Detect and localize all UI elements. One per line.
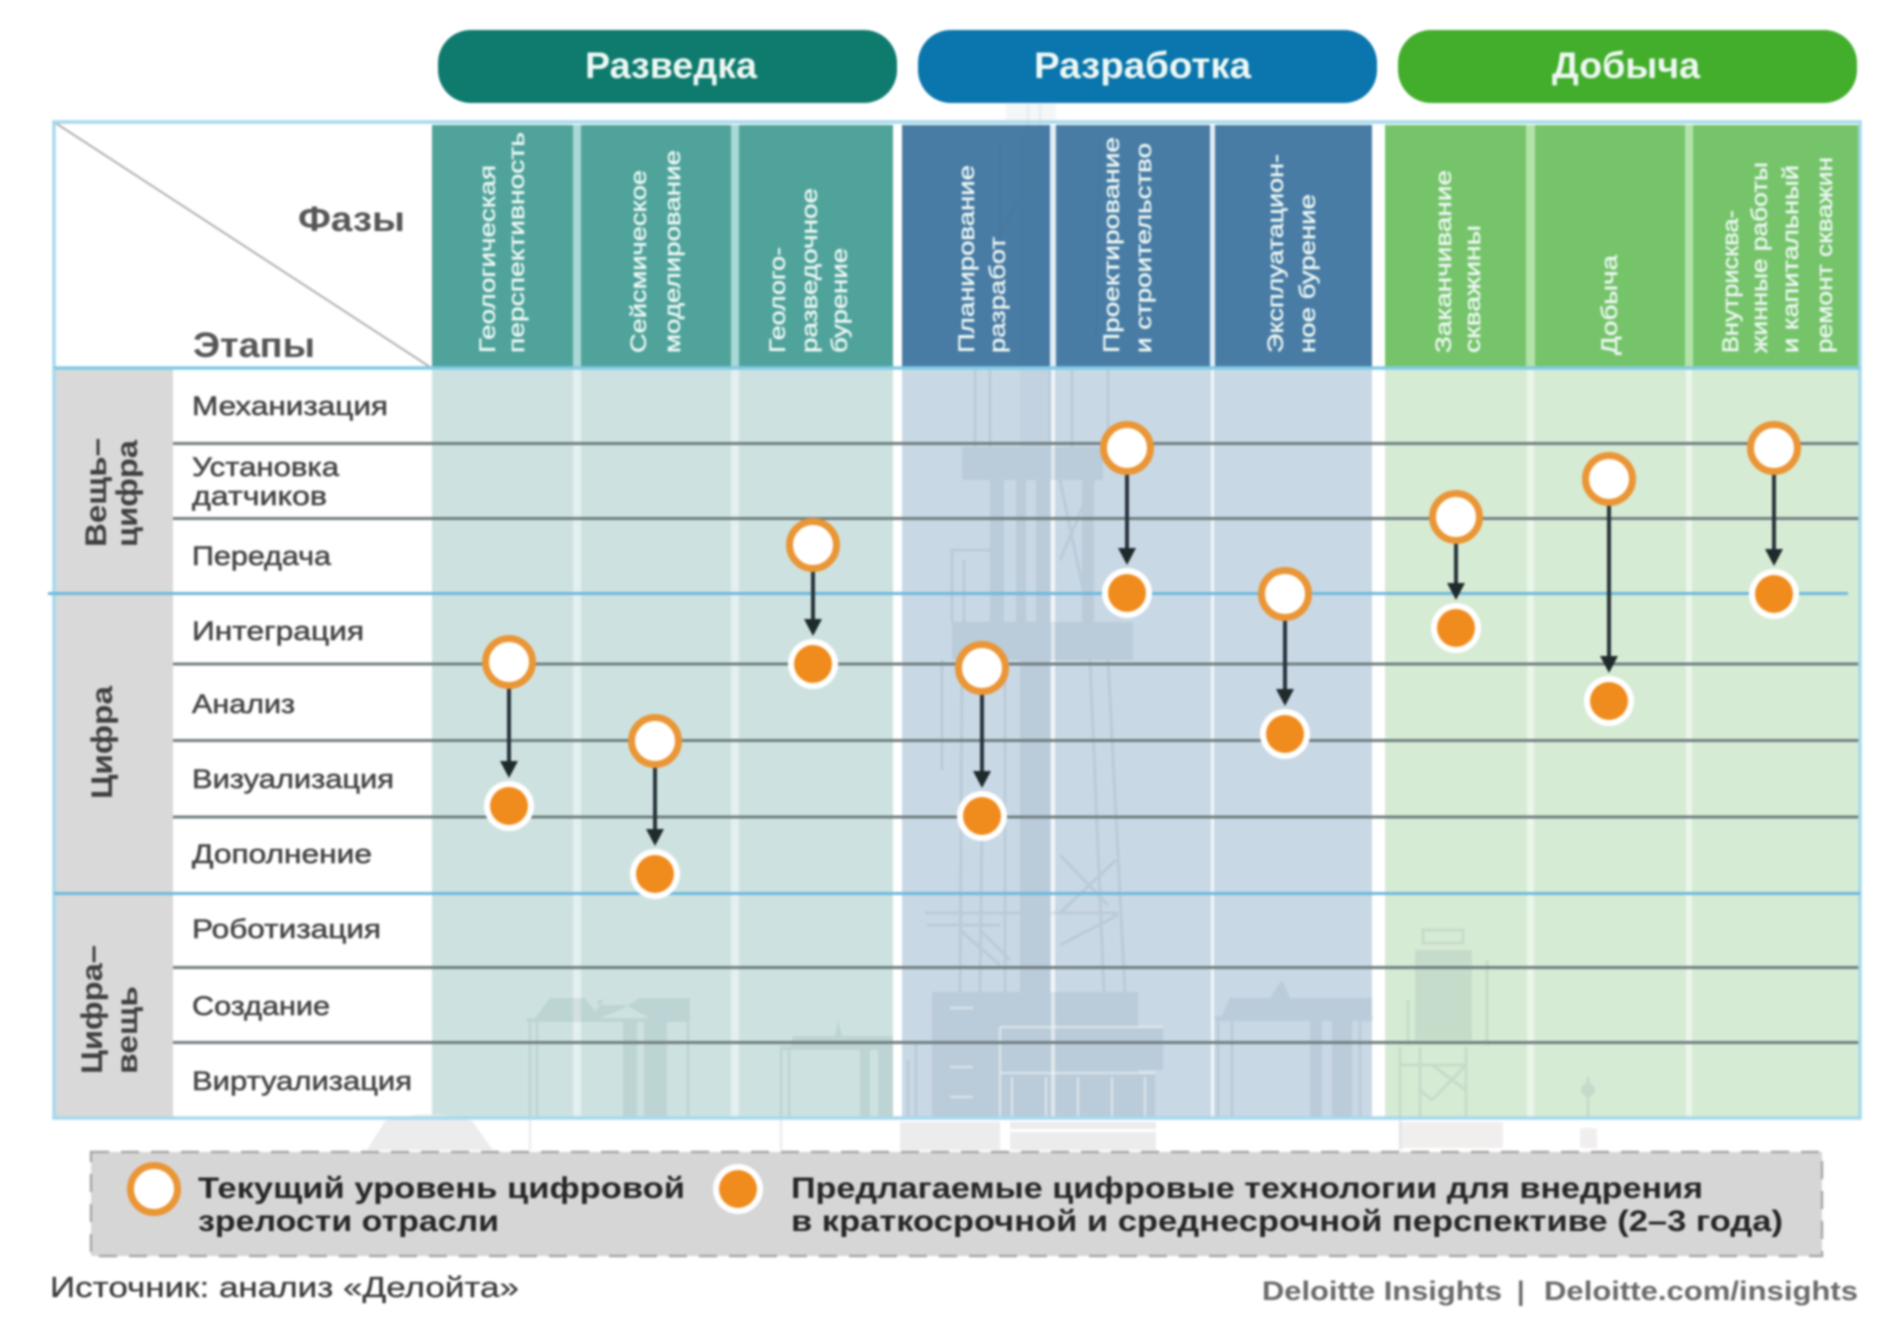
header pills: three stages [438, 30, 1857, 103]
legend text: proposed technologies: в краткосрочной и среднесрочной перспективе (2–3 года) [791, 1205, 1783, 1238]
header: development columns: Планирование [954, 165, 979, 353]
header: exploration columns: Сейсмическое [626, 170, 651, 353]
background illustration: oil rig and plant silhouettes [527, 104, 1595, 1150]
row labels: датчиков [192, 481, 327, 511]
row labels: Установка [192, 452, 340, 482]
header: development columns: разработ [985, 237, 1010, 353]
legend text: current level [198, 1172, 685, 1238]
header: production columns: Заканчивание [1431, 170, 1456, 353]
pill: Разведка: Разведка [585, 45, 757, 86]
header: exploration columns: разведочное [797, 188, 822, 353]
legend icon: current level [130, 1166, 178, 1212]
group label: Вещь–цифра: цифра [111, 440, 144, 547]
marker: Заканчивание скважины [1431, 494, 1481, 653]
group label: Цифра: Цифра [86, 686, 119, 799]
row labels: Дополнение [192, 839, 372, 869]
pill: Разработка: Разработка [1034, 45, 1251, 86]
marker: Геолого-разведочное бурение [788, 522, 838, 689]
heading: Этапы: Этапы [193, 326, 315, 365]
group label: Вещь–цифра: Вещь– [80, 438, 113, 547]
header: production columns: Добыча [1597, 254, 1622, 355]
row labels: Визуализация [192, 764, 394, 794]
header: exploration columns: Геолого- [765, 247, 790, 353]
credit line: Deloitte.com/insights [1544, 1276, 1858, 1306]
group label: Цифра–вещь: вещь [111, 986, 144, 1074]
row labels: Анализ [192, 689, 295, 719]
pill: Разработка [918, 30, 1377, 103]
row labels: Передача [192, 541, 332, 571]
header: development columns: Проектирование [1099, 137, 1124, 353]
header: exploration columns: перспективность [504, 132, 529, 353]
marker: Добыча [1584, 456, 1634, 726]
legend text: current level: Текущий уровень цифровой [198, 1172, 685, 1205]
header: production columns: скважины [1460, 225, 1485, 353]
pill: Добыча: Добыча [1552, 45, 1700, 86]
marker: Сейсмическое моделирование [630, 718, 680, 899]
marker: Проектирование и строительство [1102, 424, 1152, 618]
group label: Цифра–вещь: Цифра– [76, 945, 109, 1074]
header: development columns: и строительство [1131, 143, 1156, 353]
credit line: Deloitte Insights [1262, 1276, 1502, 1306]
row labels: Создание [192, 991, 330, 1021]
legend icon: proposed technologies [713, 1164, 763, 1214]
row labels: Виртуализация [192, 1066, 412, 1096]
header: development columns [902, 125, 1372, 367]
pill: Добыча [1398, 30, 1857, 103]
credit line [1262, 1276, 1858, 1306]
white details on rig base [950, 1008, 1163, 1117]
row labels: Интеграция [192, 616, 364, 646]
legend text: proposed technologies [791, 1172, 1783, 1238]
header: production columns: жинные работы [1747, 162, 1772, 353]
header: production columns: и капитальный [1778, 165, 1803, 353]
column header band [432, 125, 1860, 367]
corner header cell: phases and steps [54, 122, 430, 367]
row labels [192, 391, 412, 1096]
marker: Геологическая перспективность [484, 638, 534, 831]
header: exploration columns: моделирование [660, 150, 685, 353]
header: production columns [1385, 125, 1860, 367]
header: exploration columns: Геологическая [475, 165, 500, 353]
ground shapes below the table [367, 1114, 1597, 1150]
header: exploration columns: бурение [827, 248, 852, 353]
source note: Источник: анализ «Делойта» [50, 1272, 519, 1304]
marker: Планирование разработ [957, 644, 1007, 841]
credit line: | [1517, 1276, 1525, 1306]
group label: Вещь–цифра [80, 438, 144, 547]
body colour columns [432, 368, 1860, 1118]
marker: Внутрискважинные работы и капитальный ремонт скважин [1749, 424, 1799, 619]
row labels: Механизация [192, 391, 388, 421]
marker: Эксплуатационное бурение [1260, 570, 1310, 759]
group label: Цифра–вещь [76, 945, 144, 1074]
header: development columns: ное бурение [1295, 194, 1320, 353]
legend text: current level: зрелости отрасли [198, 1205, 499, 1238]
row labels: Роботизация [192, 914, 381, 944]
left side group column [54, 368, 173, 1118]
legend panel [91, 1152, 1822, 1256]
legend text: proposed technologies: Предлагаемые цифровые технологии для внедрения [791, 1172, 1703, 1205]
header: production columns: ремонт скважин [1812, 157, 1837, 353]
header: production columns: Внутрисква- [1718, 210, 1743, 353]
header: exploration columns [432, 125, 893, 367]
heading: Фазы: Фазы [298, 200, 405, 239]
pill: Разведка [438, 30, 897, 103]
header: development columns: Эксплуатацион- [1263, 154, 1288, 353]
